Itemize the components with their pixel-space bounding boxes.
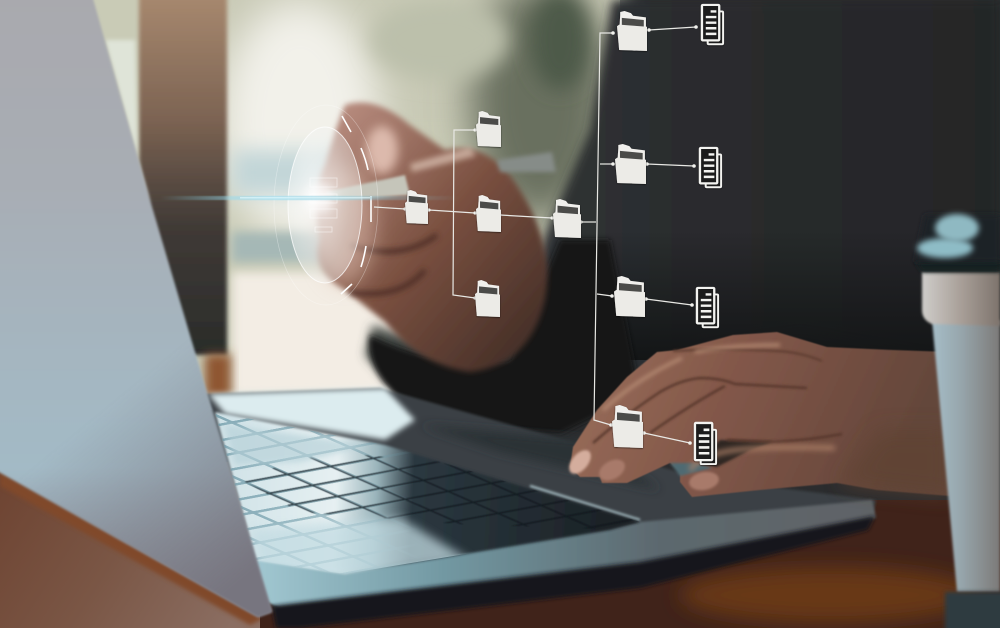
connector nodes (403, 25, 698, 445)
icon: folder upper middle (476, 111, 501, 147)
icon: document row 3 (697, 288, 718, 327)
keyboard (214, 410, 640, 576)
icon: folder centre (476, 195, 501, 232)
laptop screen lid (0, 0, 272, 617)
icon: folder lower middle (475, 280, 500, 317)
pen (325, 147, 556, 200)
icon: folder right row 3 (614, 276, 645, 317)
icon: document row 4 (695, 423, 716, 464)
hologram dial (274, 105, 378, 305)
dark sweater torso (365, 0, 1000, 434)
light flare (160, 196, 460, 200)
folder icons (405, 11, 647, 448)
icon: document row 1 (702, 5, 723, 44)
left hand holding pen (315, 102, 547, 372)
icon: document row 2 (700, 148, 721, 187)
icon: folder right row 2 (615, 144, 646, 184)
hierarchy connector lines (374, 27, 696, 443)
document icons (695, 5, 723, 464)
coffee cup (915, 214, 1000, 628)
icon: folder left (405, 190, 428, 224)
wooden table (0, 354, 1000, 628)
right hand on trackpad (565, 332, 950, 497)
icon: folder right row 1 (617, 11, 647, 51)
icon: root folder (553, 199, 581, 238)
icon: folder right row 4 (612, 405, 643, 448)
laptop base (205, 388, 876, 628)
